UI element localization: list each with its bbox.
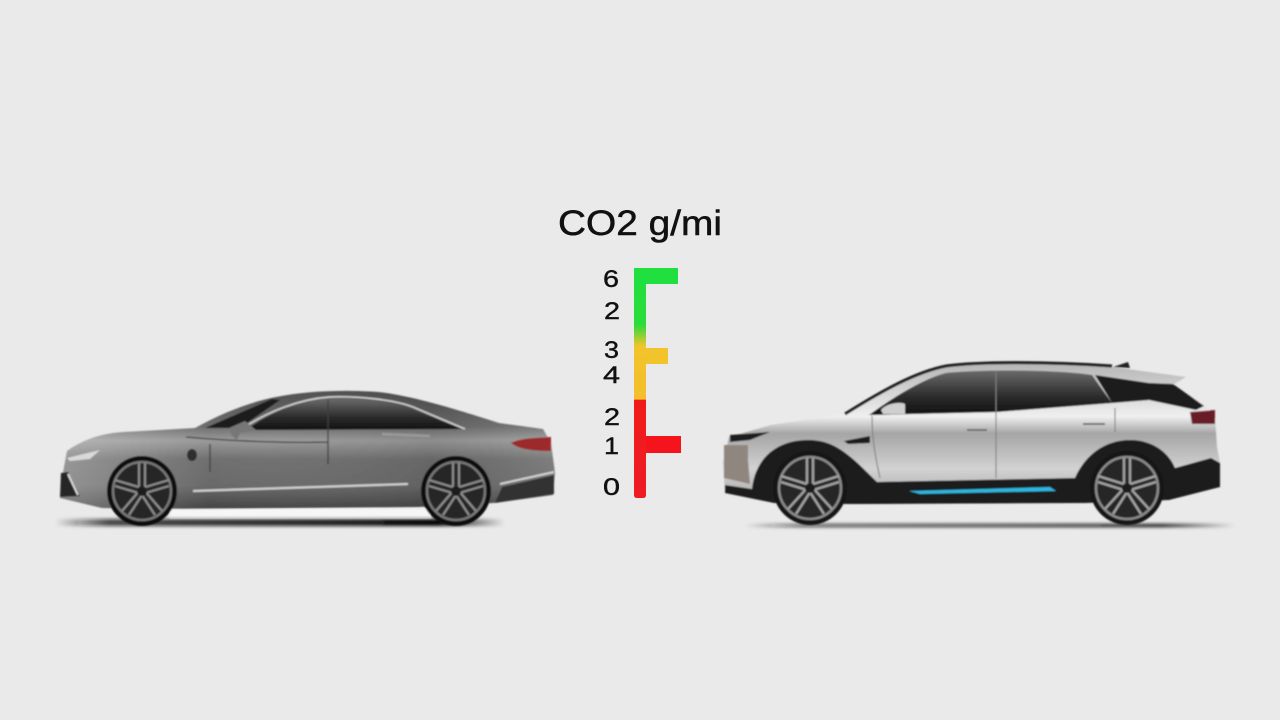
sedan front grille bbox=[60, 472, 80, 497]
sedan car bbox=[55, 391, 555, 526]
SUV charge port bbox=[844, 436, 870, 444]
SUV black cladding bbox=[725, 440, 1220, 504]
gauge labels: 2 bbox=[604, 298, 620, 325]
sedan headlight bbox=[67, 450, 100, 461]
gauge stem bbox=[634, 268, 646, 498]
sedan tail light bbox=[511, 437, 551, 451]
SUV roof line bbox=[845, 363, 1112, 414]
SUV side windows bbox=[869, 371, 1112, 415]
SUV door handles bbox=[967, 424, 1105, 430]
title: CO2 g/mi bbox=[558, 204, 722, 243]
sedan mirror bbox=[229, 421, 256, 440]
gauge labels: 6 bbox=[603, 266, 619, 293]
SUV blue accent strip bbox=[909, 487, 1056, 494]
sedan body bbox=[60, 391, 555, 509]
SUV body bbox=[723, 363, 1220, 504]
SUV tail light bbox=[1190, 410, 1215, 424]
sedan ground glow bbox=[170, 509, 430, 518]
SUV door lines bbox=[872, 372, 1115, 478]
gauge labels: 4 bbox=[603, 362, 620, 389]
SUV rear wheel bbox=[1090, 451, 1164, 525]
green top marker bbox=[634, 268, 678, 284]
sedan front wheel bbox=[107, 456, 177, 526]
SUV roof fin bbox=[1113, 362, 1130, 368]
sedan rear wheel bbox=[421, 456, 491, 526]
SUV mirror bbox=[881, 403, 905, 414]
gauge labels: 0 bbox=[603, 474, 620, 501]
gauge labels: 1 bbox=[604, 433, 619, 460]
sedan door lines and trim bbox=[186, 400, 328, 472]
SUV headlight bbox=[730, 432, 770, 442]
SUV ground shadow bbox=[745, 524, 1235, 527]
sedan ground shadow bbox=[55, 519, 505, 526]
gauge labels bbox=[603, 266, 620, 501]
SUV car bbox=[723, 362, 1235, 527]
SUV front fascia bbox=[724, 445, 750, 484]
gauge labels: 3 bbox=[604, 337, 619, 364]
gauge scale bbox=[634, 268, 681, 498]
sedan door handle bbox=[382, 434, 430, 436]
yellow middle marker bbox=[646, 348, 668, 364]
SUV rear quarter window bbox=[1095, 375, 1204, 410]
gauge labels: 2 bbox=[604, 404, 620, 431]
sedan windshield bbox=[205, 399, 280, 428]
sedan fuel flap bbox=[187, 449, 197, 461]
sedan side windows bbox=[246, 399, 462, 430]
red lower marker bbox=[646, 436, 681, 453]
SUV front wheel bbox=[773, 451, 847, 525]
